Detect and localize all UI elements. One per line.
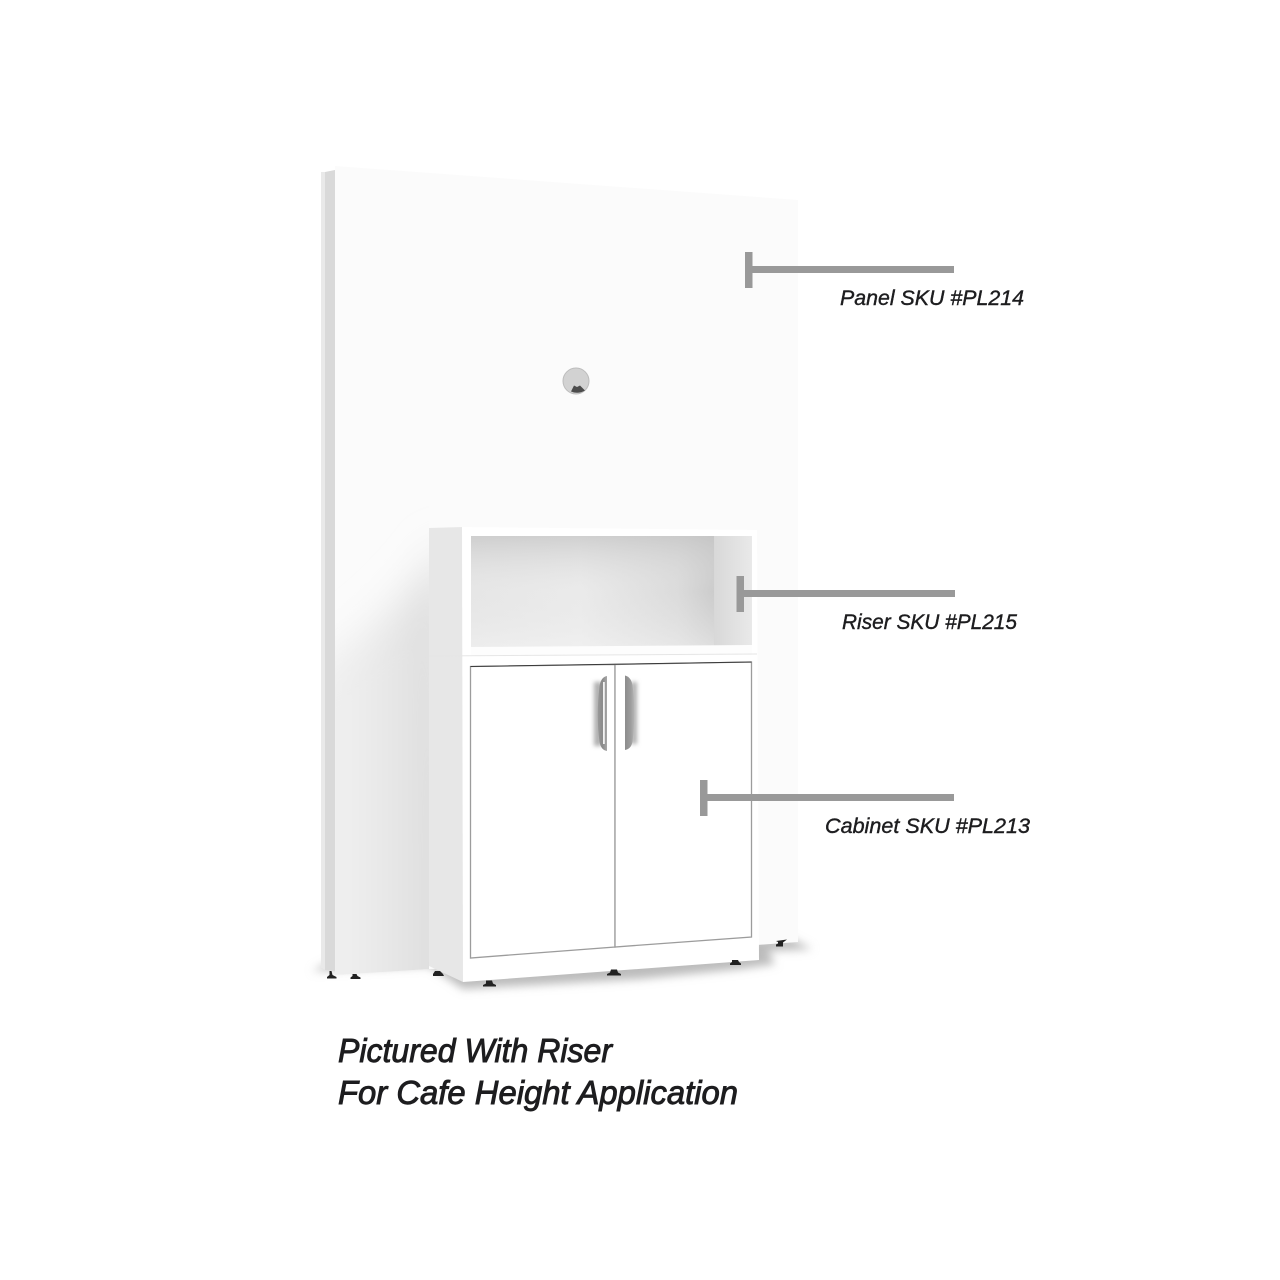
callout: panel bbox=[745, 252, 1024, 310]
right inner wall bbox=[714, 536, 752, 647]
cabinet assembly bbox=[429, 527, 759, 986]
door top shadow bbox=[470, 662, 752, 666]
panel edge strip bbox=[321, 170, 335, 971]
label: cabinet SKU: Cabinet SKU #PL213 bbox=[825, 815, 1030, 838]
riser opening bbox=[471, 536, 752, 656]
riser seam bbox=[429, 654, 757, 656]
handle: right bbox=[625, 676, 634, 750]
back wall bbox=[471, 536, 714, 647]
shelf edge bbox=[471, 645, 752, 656]
handle: left bbox=[598, 676, 607, 751]
callout: cabinet bbox=[700, 780, 1030, 838]
cabinet cast shadow on panel bbox=[335, 561, 429, 975]
door: right bbox=[615, 662, 752, 947]
caption: Pictured With Riser bbox=[338, 1032, 614, 1069]
cabinet feet bbox=[433, 960, 741, 986]
grommet: cable port bbox=[563, 368, 589, 394]
panel: wall panel bbox=[321, 170, 798, 979]
panel edge highlight bbox=[321, 172, 325, 970]
panel feet bbox=[327, 940, 787, 979]
label: panel SKU: Panel SKU #PL214 bbox=[840, 287, 1024, 310]
panel face bbox=[335, 166, 798, 975]
label: riser SKU: Riser SKU #PL215 bbox=[842, 611, 1017, 634]
cabinet front frame bbox=[462, 527, 759, 982]
caption: For Cafe Height Application bbox=[338, 1074, 738, 1111]
caption bbox=[338, 1032, 738, 1111]
cabinet side face bbox=[429, 527, 463, 982]
door: left bbox=[470, 664, 615, 958]
handle shadows bbox=[594, 682, 637, 746]
callout: riser bbox=[736, 576, 1017, 634]
floor shadow bbox=[312, 938, 812, 989]
